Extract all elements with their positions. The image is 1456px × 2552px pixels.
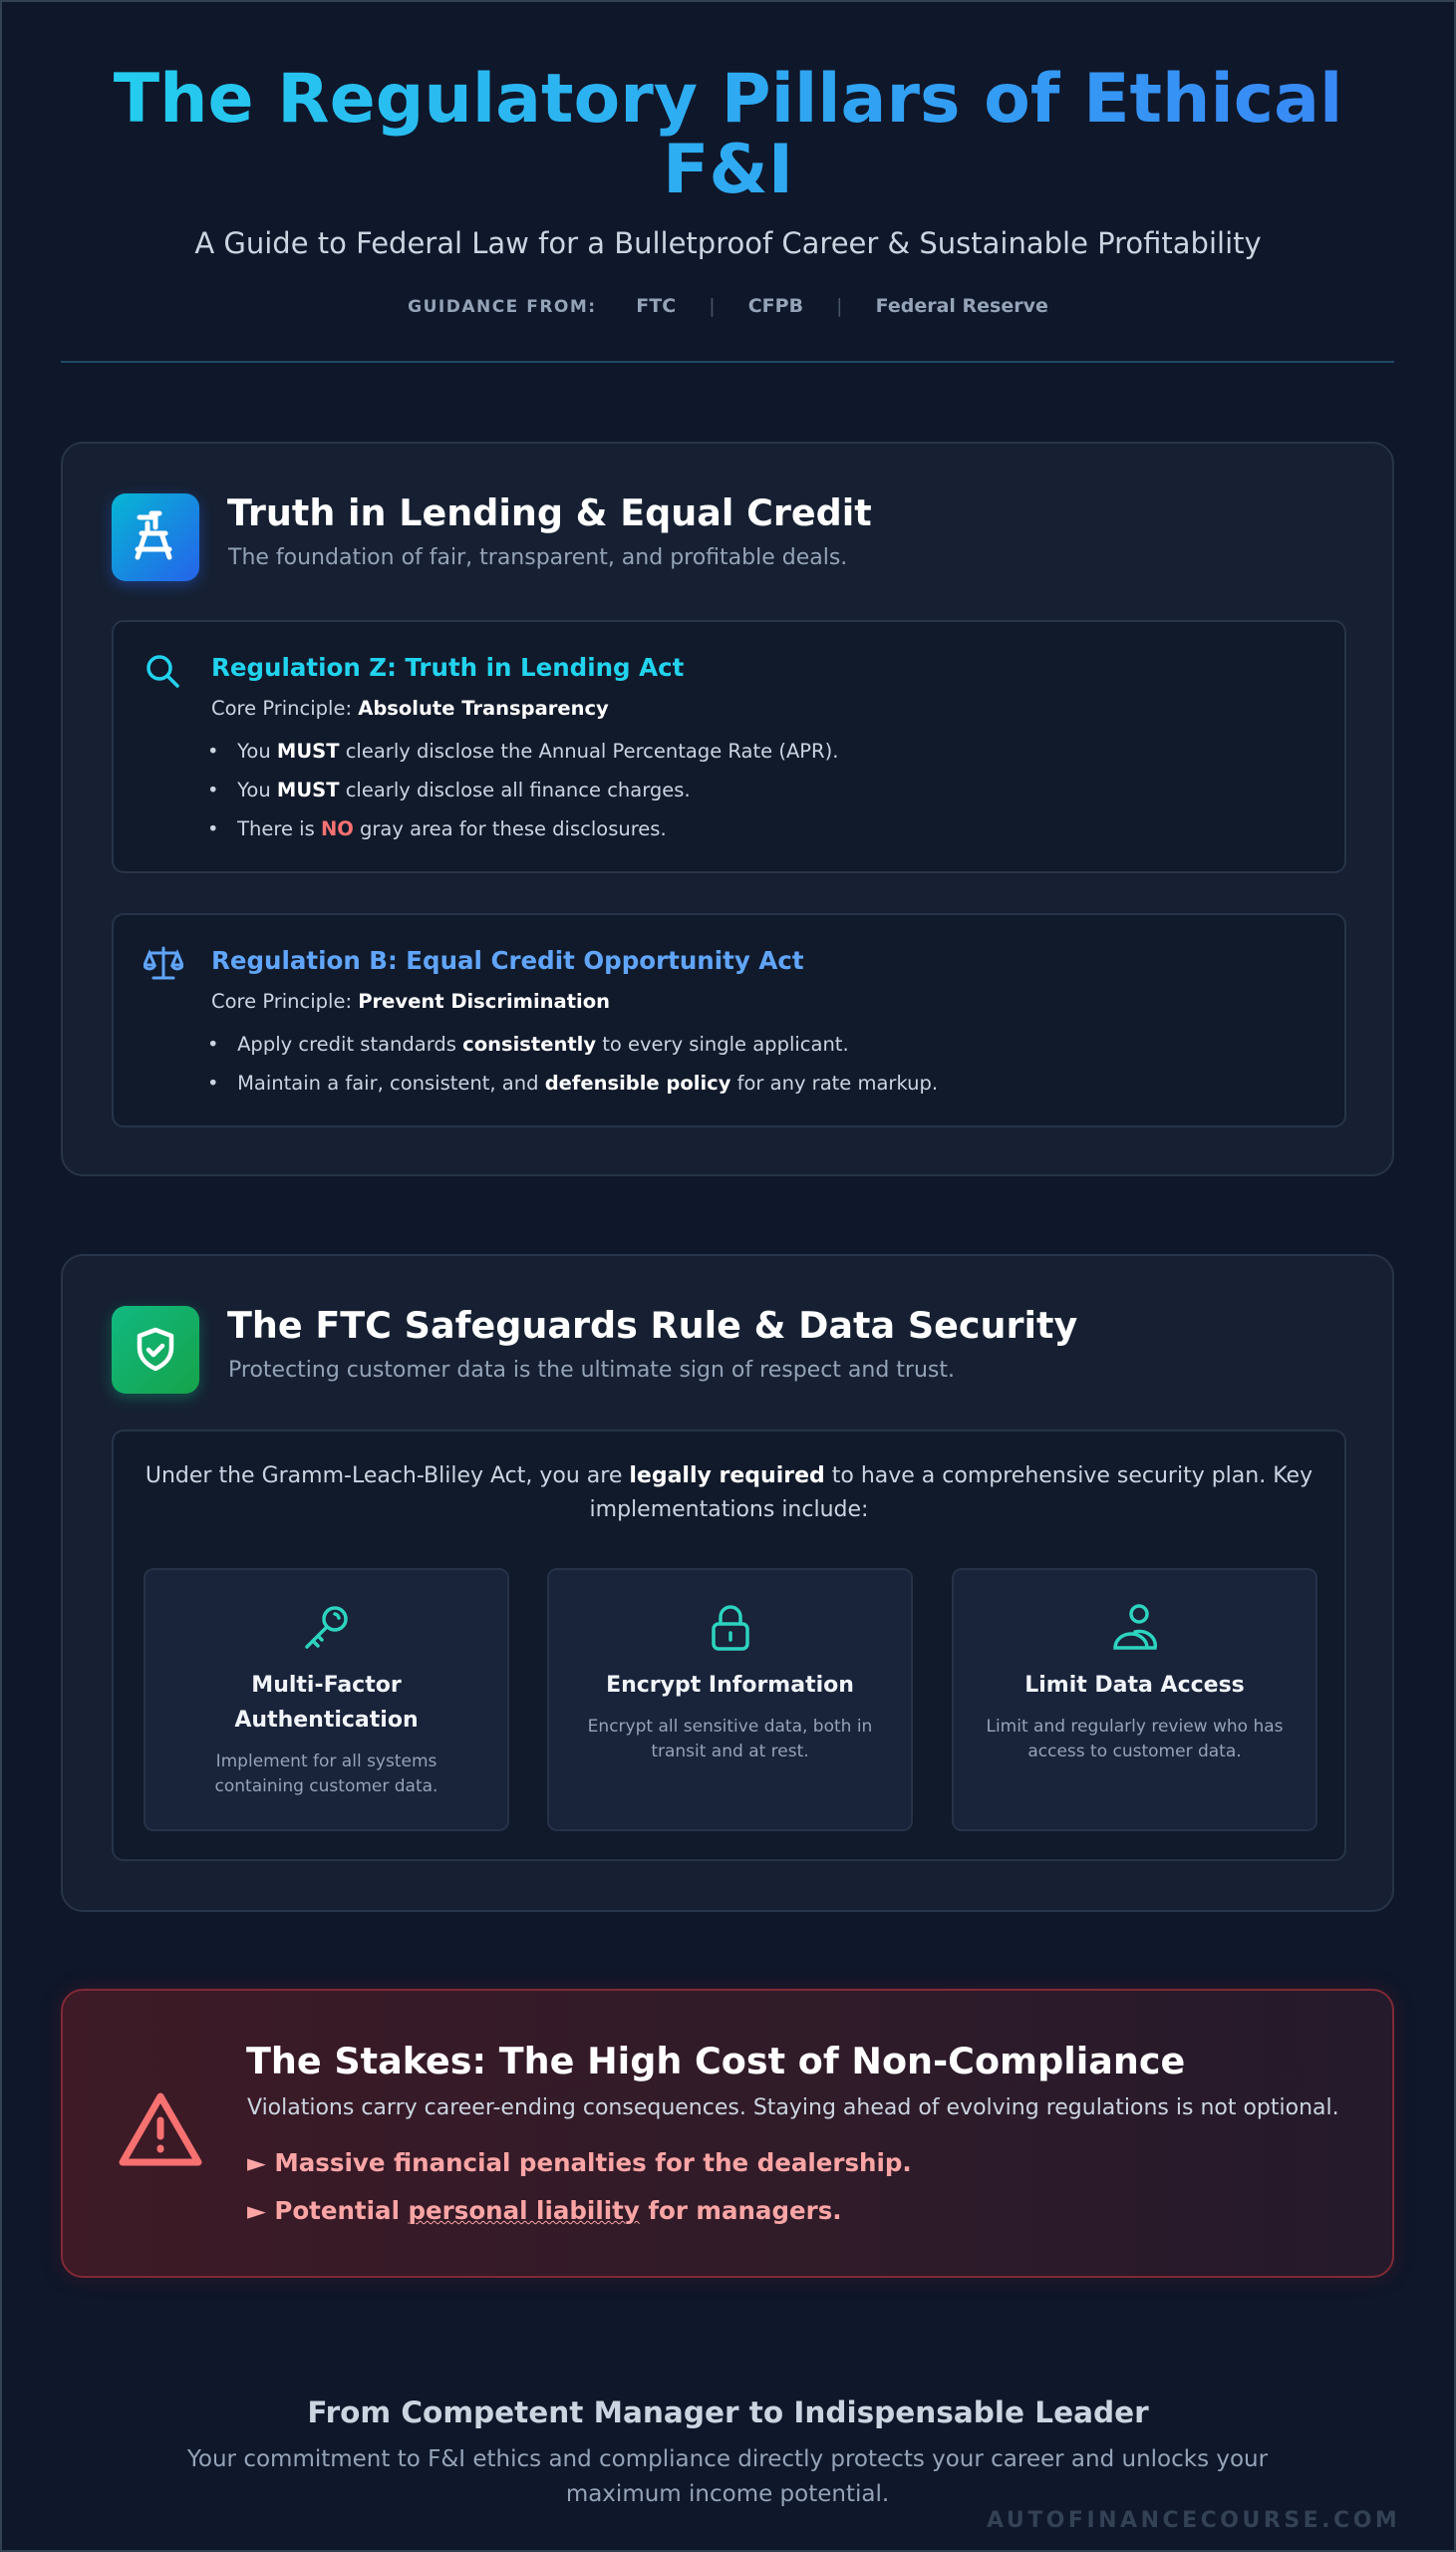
box: regulation B: • Maintain a fair, consistent, and defensible policy for any rate markup.	[207, 1072, 938, 1095]
panel: stakes	[61, 1989, 1394, 2278]
box: regulation Z: • You MUST clearly disclose all finance charges.	[207, 779, 691, 801]
watermark: AUTOFINANCECOURSE.COM	[987, 2508, 1400, 2533]
item: limit access: Limit and regularly review who has	[986, 1717, 1284, 1737]
box: regulation B: Core Principle: Prevent Discrimination	[211, 990, 610, 1013]
panel: safeguards rule: Protecting customer data is the ultimate sign of respect and trust.	[228, 1358, 955, 1383]
footer heading: From Competent Manager to Indispensable Leader	[307, 2395, 1149, 2429]
item: encrypt: transit and at rest.	[651, 1742, 809, 1761]
reg Z title: Regulation Z: Truth in Lending Act	[211, 653, 684, 682]
subheading: The foundation of fair, transparent, and profitable deals.	[228, 545, 847, 570]
item: encrypt	[547, 1568, 913, 1831]
item: MFA: Authentication	[234, 1708, 419, 1733]
item: MFA	[144, 1568, 509, 1831]
item: limit access	[952, 1568, 1317, 1831]
panel: truth in lending	[61, 442, 1394, 1176]
footer text: Your commitment to F&I ethics and compliance directly protects your career and unlocks your maximum income potential.	[187, 2446, 1268, 2507]
item: MFA: Implement for all systems	[216, 1752, 437, 1771]
item: limit access: access to customer data.	[1027, 1742, 1242, 1761]
intro text: Under the Gramm-Leach-Bliley Act, you are legally required to have a comprehensive security plan. Key implementations include:	[146, 1463, 1312, 1522]
icon: scales	[144, 947, 183, 979]
box: implementations	[112, 1430, 1346, 1861]
box: regulation Z	[112, 620, 1346, 873]
icon: balance	[112, 493, 199, 581]
item: MFA: containing customer data.	[215, 1776, 437, 1796]
consequences: ► Massive financial penalties for the dealership.	[247, 2148, 912, 2177]
heading: The FTC Safeguards Rule & Data Security	[227, 1304, 1077, 1347]
icon: warning	[120, 2093, 201, 2165]
heading: Truth in Lending & Equal Credit	[227, 491, 872, 534]
item: encrypt: Encrypt Information	[606, 1673, 854, 1698]
heading: The Stakes: The High Cost of Non-Compliance	[246, 2040, 1185, 2082]
panel: safeguards rule	[61, 1254, 1394, 1912]
box: regulation Z: • There is NO gray area for these disclosures.	[207, 817, 667, 840]
title: The Regulatory Pillars of Ethical	[114, 60, 1342, 139]
box: regulation B	[112, 913, 1346, 1127]
icon: shield	[112, 1306, 199, 1394]
title	[0, 64, 1456, 205]
guidance sources: GUIDANCE FROM: FTC | CFPB | Federal Reserve	[408, 295, 1048, 317]
panel: stakes: Violations carry career-ending consequences. Staying ahead of evolving regulations is not optional.	[247, 2095, 1339, 2120]
subtitle: A Guide to Federal Law for a Bulletproof Career & Sustainable Profitability	[194, 226, 1262, 260]
bullets: • Apply credit standards consistently to every single applicant.	[207, 1033, 849, 1056]
icon: magnifier	[146, 655, 179, 688]
item: limit access: Limit Data Access	[1024, 1673, 1245, 1698]
title: F&I	[663, 131, 793, 209]
reg B title: Regulation B: Equal Credit Opportunity Act	[211, 946, 804, 975]
panel: stakes: ► Potential personal liability for managers.	[247, 2196, 842, 2225]
item: encrypt: Encrypt all sensitive data, both in	[588, 1717, 872, 1737]
bullets: • You MUST clearly disclose the Annual Percentage Rate (APR).	[207, 740, 838, 763]
box: regulation Z: Core Principle: Absolute Transparency	[211, 697, 609, 720]
item: MFA: Multi-Factor	[251, 1673, 402, 1698]
